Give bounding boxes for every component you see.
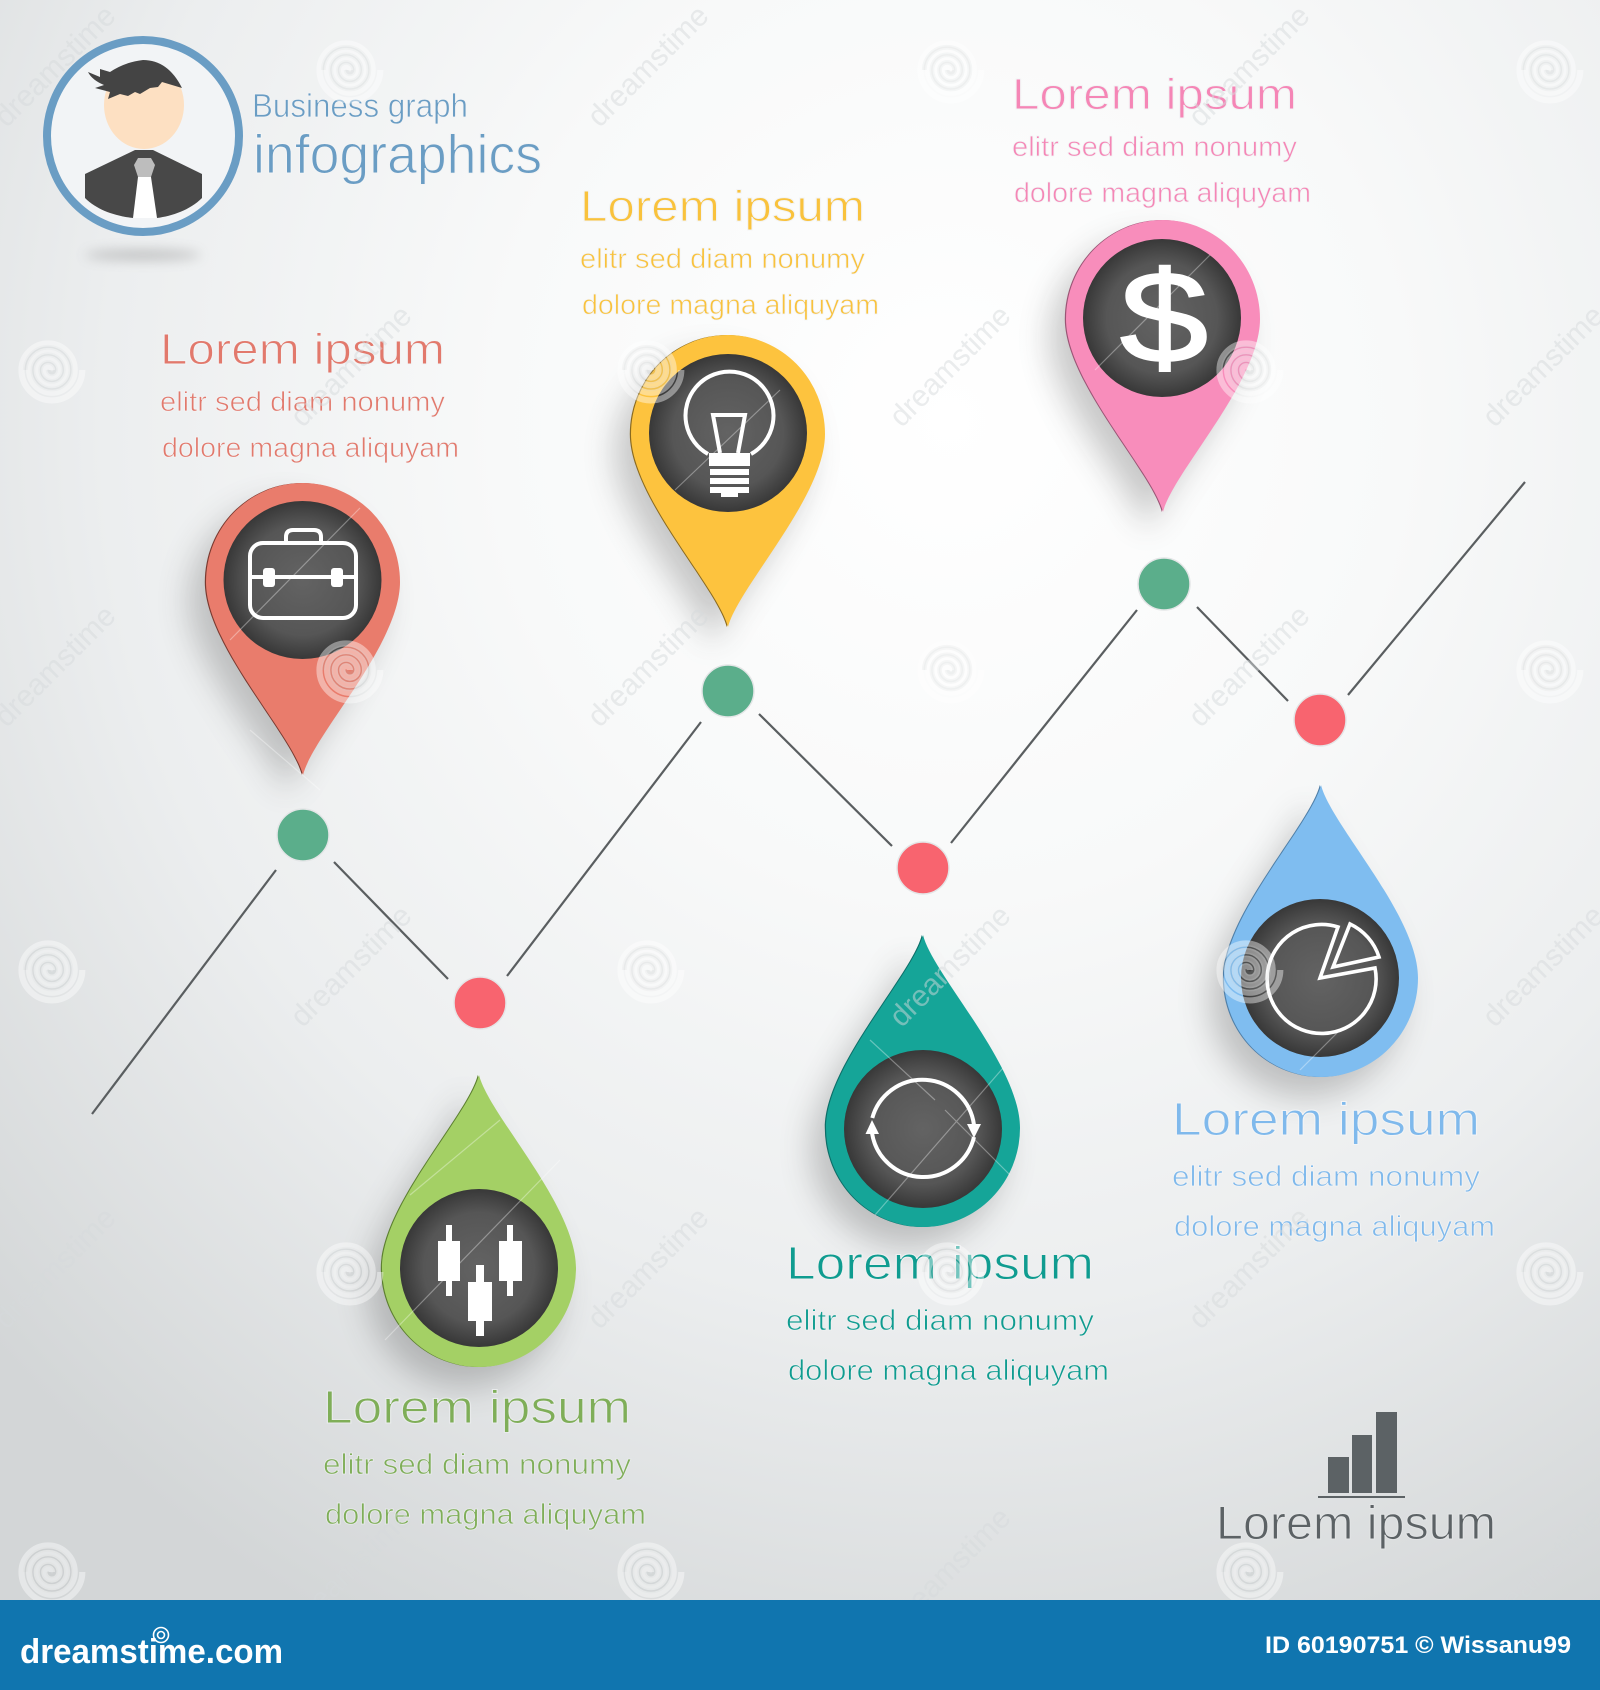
title: infographics: [253, 123, 542, 185]
line two: dolore magna aliquyam: [1174, 1211, 1495, 1243]
pin: briefcase (red): [189, 483, 400, 795]
footer logo text: dreamstime.com: [20, 1633, 283, 1671]
icon: light bulb: [686, 372, 774, 497]
line two: dolore magna aliquyam: [582, 289, 879, 320]
pin: dollar (pink): [1050, 220, 1260, 532]
header text: [252, 87, 542, 185]
text block: yellow: [580, 182, 879, 320]
watermark grid: dreamstime: [284, 1501, 418, 1635]
watermark grid: dreamstime: [284, 899, 418, 1033]
watermark grid: dreamstime: [1182, 0, 1316, 133]
footer credit: ID 60190751 © Wissanu99: [1265, 1632, 1571, 1659]
heading: Lorem ipsum: [160, 325, 445, 374]
line one: elitr sed diam nonumy: [580, 243, 865, 274]
line one: elitr sed diam nonumy: [786, 1305, 1095, 1337]
line one: elitr sed diam nonumy: [323, 1449, 632, 1481]
text block: green: [323, 1381, 646, 1531]
watermark grid: dreamstime: [883, 1501, 1017, 1635]
watermark grid: dreamstime: [883, 299, 1017, 433]
line chart segments: [92, 482, 1525, 1114]
heading: Lorem ipsum: [786, 1237, 1094, 1289]
subtitle: Business graph: [252, 87, 468, 124]
line one: elitr sed diam nonumy: [1012, 131, 1297, 162]
avatar icon: businessman: [47, 40, 239, 260]
drop: candlestick (green): [367, 1075, 576, 1387]
line two: dolore magna aliquyam: [162, 432, 459, 463]
logo caption: Lorem ipsum: [1216, 1496, 1496, 1549]
watermark grid: dreamstime: [581, 1201, 715, 1335]
heading: Lorem ipsum: [1012, 70, 1297, 119]
heading: Lorem ipsum: [323, 1381, 631, 1433]
text block: teal: [786, 1237, 1109, 1387]
heading: Lorem ipsum: [580, 182, 865, 231]
chart dots: [277, 558, 1346, 1029]
drop: refresh (teal): [811, 935, 1020, 1247]
icon: bar chart logo: [1318, 1412, 1405, 1498]
line two: dolore magna aliquyam: [1014, 177, 1311, 208]
footer logo spiral: [154, 1628, 168, 1642]
icon: candlesticks: [438, 1225, 522, 1336]
pin: light bulb (yellow): [615, 335, 825, 647]
icon: dollar sign: $: [1120, 245, 1208, 390]
line two: dolore magna aliquyam: [325, 1499, 646, 1531]
line one: elitr sed diam nonumy: [1172, 1161, 1481, 1193]
watermark grid: dreamstime: [1182, 599, 1316, 733]
line one: elitr sed diam nonumy: [160, 386, 445, 417]
text block: blue: [1172, 1093, 1495, 1243]
watermark grid: dreamstime: [581, 0, 715, 133]
icon: refresh arrows: [866, 1080, 981, 1177]
icon: pie chart: [1267, 924, 1379, 1033]
watermark grid: dreamstime: [883, 899, 1017, 1033]
heading: Lorem ipsum: [1172, 1093, 1480, 1145]
watermark grid: dreamstime: [1182, 1201, 1316, 1335]
line two: dolore magna aliquyam: [788, 1355, 1109, 1387]
watermark grid: dreamstime: [284, 299, 418, 433]
icon: briefcase: [250, 530, 356, 618]
text block: red: [160, 325, 459, 463]
text block: pink: [1012, 70, 1311, 208]
drop: pie chart (blue): [1209, 785, 1418, 1097]
footer band: [0, 1600, 1600, 1690]
watermark grid: dreamstime: [581, 599, 715, 733]
